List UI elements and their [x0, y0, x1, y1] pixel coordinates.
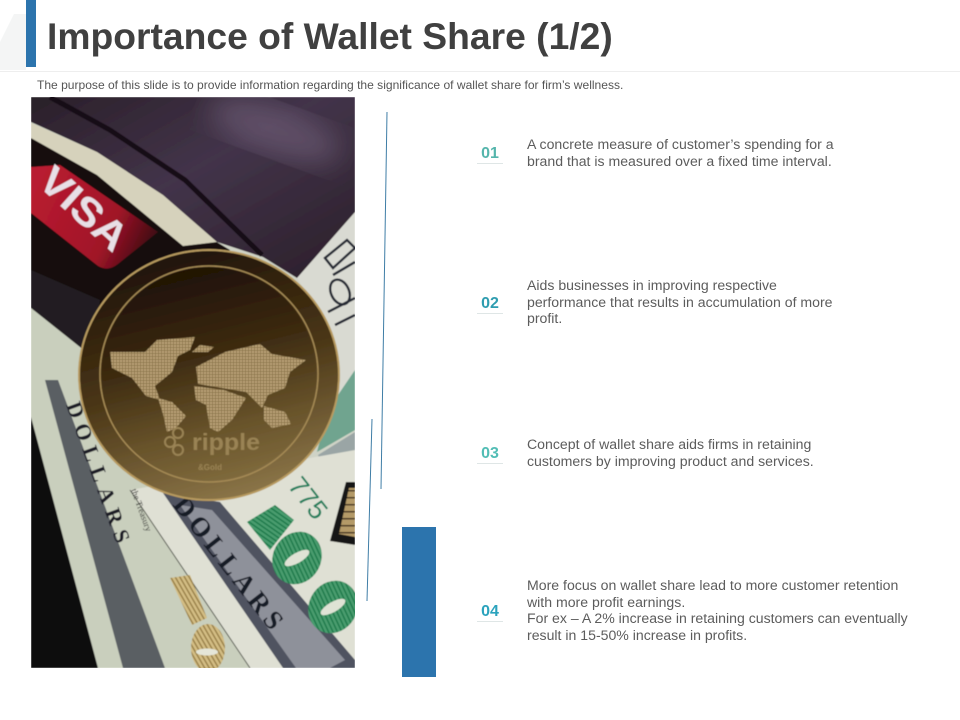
text 02: profit. — [527, 310, 562, 326]
Treasury text: the Treasury — [129, 487, 154, 533]
number 04 — [477, 602, 503, 622]
band lettering: DOLLARS — [167, 490, 293, 639]
green 100 numerals — [247, 505, 367, 642]
text 01: brand that is measured over a fixed time interval. — [527, 152, 832, 168]
text 03: Concept of wallet share aids firms in retaining — [527, 436, 811, 452]
number 02 — [477, 294, 503, 314]
diagonal lines — [366, 112, 388, 601]
dark bill — [31, 270, 100, 370]
text 03 — [527, 436, 814, 469]
text 01: A concrete measure of customer’s spending for a — [527, 136, 834, 152]
bills base — [31, 97, 355, 668]
paper strip — [31, 123, 217, 246]
text 04: More focus on wallet share lead to more customer retention — [527, 577, 898, 593]
header rule — [0, 71, 960, 72]
photo: wallet, gold coin and dollar bills: DOLLARS — [61, 398, 138, 553]
photo: wallet, gold coin and dollar bills — [31, 97, 355, 668]
bill band right — [163, 493, 355, 668]
gold coin — [78, 249, 340, 501]
number 01 — [477, 144, 503, 164]
gold ink mark — [170, 575, 225, 672]
gold caption: &Gold — [198, 463, 222, 472]
text 02: Aids businesses in improving respective — [527, 277, 777, 293]
wallet leather — [31, 84, 355, 278]
ripple wordmark: ripple — [192, 429, 260, 455]
item 04 — [477, 577, 908, 643]
number 01: 01 — [481, 145, 499, 162]
serial marks on upper bill — [325, 240, 355, 325]
red VISA card — [30, 158, 158, 269]
lower-left bill — [31, 308, 260, 668]
text 02 — [527, 277, 833, 326]
dark backdrop top left — [31, 130, 230, 345]
blue accent rectangle — [402, 527, 436, 677]
ripple logo — [165, 428, 183, 455]
decorative header slant — [0, 14, 26, 70]
green serial: 775 — [282, 471, 334, 525]
bill band left — [45, 380, 165, 668]
main bill in front — [130, 450, 355, 668]
number 02: 02 — [481, 295, 499, 312]
subtitle: The purpose of this slide is to provide information regarding the significance of wallet share for firm’s wellness. — [37, 78, 623, 92]
world map — [110, 337, 306, 432]
number 04: 04 — [481, 603, 499, 620]
title: Importance of Wallet Share (1/2) — [47, 15, 613, 57]
item 01 — [477, 136, 834, 168]
text 04 — [527, 577, 908, 643]
microchip — [330, 482, 355, 545]
text 02: performance that results in accumulation of more — [527, 294, 833, 310]
text 03: customers by improving product and services. — [527, 452, 814, 468]
item 02 — [477, 277, 833, 326]
text 04: For ex – A 2% increase in retaining customers can eventually — [527, 610, 908, 626]
item 03 — [477, 436, 814, 469]
text 01 — [527, 136, 834, 168]
black surface bottom left — [31, 417, 98, 668]
number 03: 03 — [481, 445, 499, 462]
text 04: with more profit earnings. — [527, 594, 685, 610]
text 04: result in 15-50% increase in profits. — [527, 626, 747, 642]
header accent bar — [26, 0, 36, 67]
number 03 — [477, 444, 503, 464]
green seal on the right — [317, 370, 355, 477]
VISA wordmark: VISA — [31, 158, 137, 260]
upper bill right of wallet — [297, 212, 355, 420]
